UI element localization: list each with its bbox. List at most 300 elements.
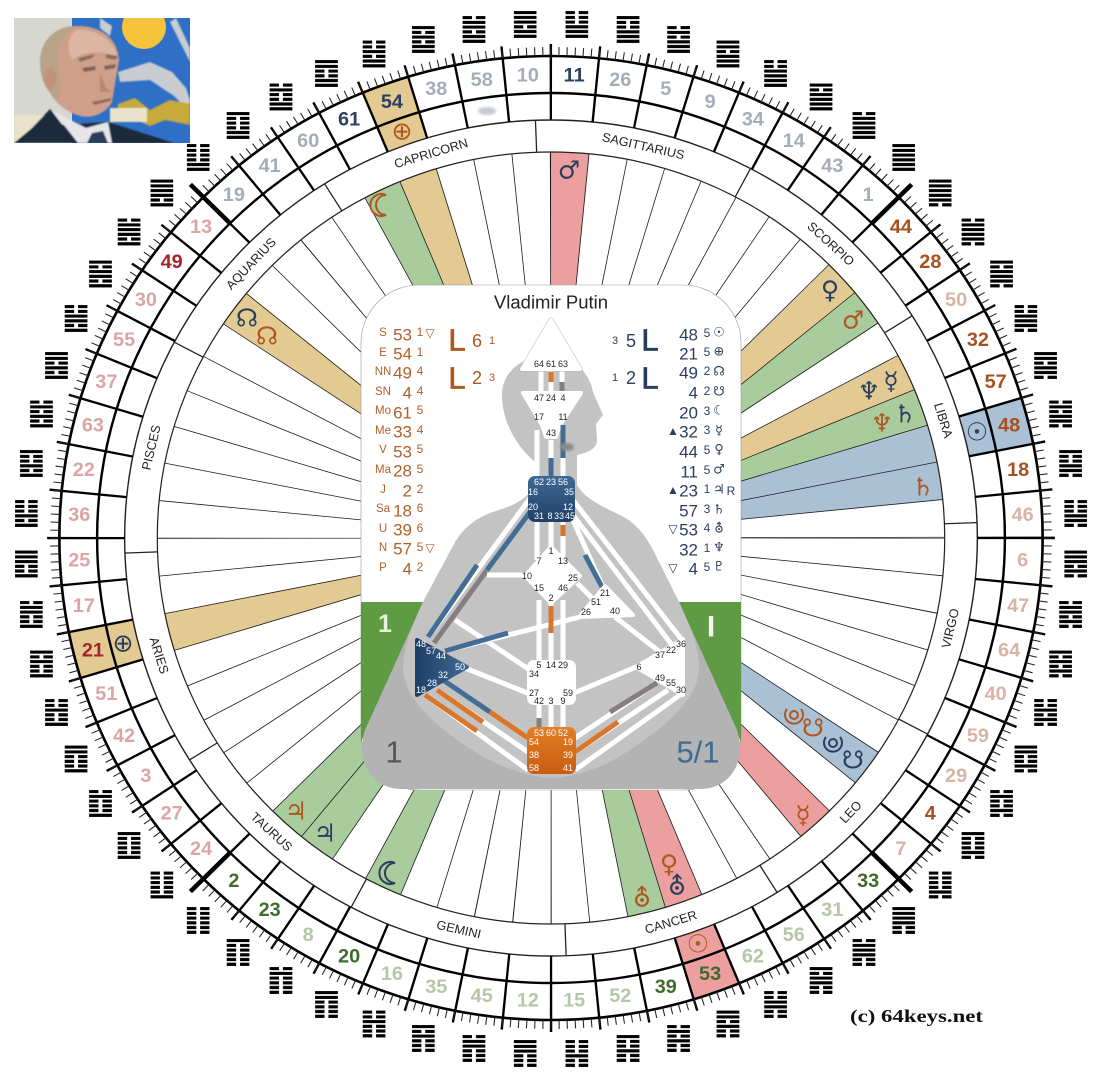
hexagram ring: ䷆ (927, 867, 954, 901)
hexagram ring: ䷂ (87, 785, 114, 820)
zodiac labels: CANCER (643, 908, 699, 937)
hexagram ring: ䷬ (460, 1030, 488, 1065)
gate numbers ring: 32 (967, 329, 989, 351)
icon: Earth in gate 54 cell: ⊕ (392, 116, 412, 146)
gate numbers ring: 47 (1007, 595, 1029, 617)
personality column: ▽ (668, 522, 678, 536)
panel: bodygraph card (361, 285, 741, 790)
hexagram ring: ䷽ (762, 986, 789, 1021)
sector: gate 48 (551, 426, 939, 574)
icon: south node gate 4 personality: ☋ (802, 714, 824, 742)
design column: 61 (393, 404, 412, 422)
personality column: 4 (689, 560, 698, 578)
centre: ajna: 47 (534, 393, 544, 403)
gate numbers ring: 4 (925, 803, 936, 825)
green corner right (677, 602, 741, 742)
highlighted cell: gate 54 (363, 75, 433, 154)
centre: G diamond: 7 (536, 556, 542, 566)
design column: 28 (393, 462, 412, 480)
design variables right: L (641, 322, 659, 358)
centre: sacral: 42 (534, 696, 544, 706)
centre: G diamond: 1 (548, 546, 554, 556)
centre: root: 38 (529, 750, 539, 760)
centre: head: 64 (534, 359, 544, 369)
hexagram ring: ䷎ (563, 1035, 590, 1070)
personality column: ♀ (714, 442, 724, 458)
centre: throat: 35 (564, 487, 574, 497)
gate numbers ring: 31 (821, 899, 843, 921)
hexagram ring: ䷼ (313, 55, 340, 90)
gate numbers ring: 19 (223, 184, 245, 206)
hexagram ring: ䷔ (28, 646, 55, 680)
gate numbers ring: 62 (742, 946, 764, 967)
personality column: ☋ (713, 384, 725, 400)
body silhouette (403, 355, 699, 778)
hexagram ring: ䷣ (13, 495, 40, 530)
hexagram ring: ䷜ (988, 785, 1015, 820)
centre: solar plexus: 49 (655, 673, 665, 683)
personality column: 21 (679, 344, 698, 364)
hexagram ring: ䷻ (267, 79, 295, 114)
gate numbers ring: 13 (190, 216, 212, 238)
centre: G diamond: 25 (568, 573, 578, 583)
hexagram ring: ䷛ (959, 214, 987, 249)
design column: Me (375, 425, 391, 437)
gate numbers ring: 39 (655, 976, 677, 998)
design column: SN (375, 386, 391, 398)
hexagram ring: ䷩ (62, 741, 90, 776)
icon: Jupiter gate 2: ♃ (285, 796, 307, 826)
gate numbers ring: 40 (985, 683, 1007, 705)
centre: root (527, 727, 576, 774)
personality variables left: 6 (472, 331, 482, 351)
centre: throat: 33 (554, 511, 564, 521)
centre: spleen: 57 (426, 646, 436, 656)
hexagram ring: ䷵ (360, 36, 388, 70)
centre: sacral: 3 (548, 696, 554, 706)
channels (425, 370, 682, 770)
design column: 5 (417, 462, 424, 476)
gate numbers ring: 30 (135, 289, 157, 311)
design column: 6 (417, 501, 424, 515)
hexagram ring: ䷺ (1012, 741, 1040, 776)
definition number: 1 (385, 734, 403, 770)
highlighted cell: gate 21 (67, 614, 145, 678)
centre: ajna: 24 (546, 393, 556, 403)
gate numbers ring: 5 (660, 78, 671, 100)
icon: Sun in gate 53 cell: ☉ (687, 930, 709, 958)
personality column: 5 (704, 560, 711, 574)
hexagram ring: ䷸ (1032, 347, 1059, 382)
icon: Moon gate 20 (379, 862, 395, 884)
icon: Moon gate 61 (370, 194, 386, 216)
centre: root: 54 (529, 737, 539, 747)
centre: G diamond (522, 546, 580, 603)
personality column: 1 (704, 482, 711, 496)
design column: 4 (417, 384, 424, 398)
personality column: 20 (679, 404, 698, 422)
design variables right: L (641, 360, 659, 396)
design column: 39 (393, 520, 412, 540)
design column: 1 (417, 345, 424, 359)
centre: sacral: 59 (563, 688, 573, 698)
gate numbers ring: 38 (425, 78, 447, 100)
personality column: ▲ (667, 483, 679, 497)
profile: 5/1 (676, 734, 720, 770)
hexagram ring: ䷗ (148, 867, 175, 901)
hexagram ring: ䷮ (1057, 596, 1084, 631)
design column: ▽ (425, 326, 435, 340)
icon: Mars gate 11: ♂ (558, 156, 580, 184)
gate numbers ring: 34 (742, 109, 764, 130)
gate numbers ring: 37 (95, 371, 117, 393)
sector: gate 20 (365, 524, 551, 895)
quadrant number right: I (707, 610, 715, 644)
design column: 5 (417, 403, 424, 417)
centre: root: 41 (563, 763, 573, 773)
centre: spleen: 44 (436, 651, 446, 661)
gate numbers ring: 22 (73, 459, 95, 481)
hexagram ring: ䷈ (714, 36, 742, 70)
icon: Mercury gate 33: ☿ (795, 800, 811, 830)
zodiac labels: PISCES (139, 424, 164, 471)
hexagram ring: ䷇ (267, 962, 295, 997)
centre: G diamond: 10 (522, 571, 532, 581)
icon: south node gate 4 design: ☋ (842, 746, 864, 774)
design column: 18 (393, 502, 412, 520)
design column: 1 (417, 325, 424, 339)
hexagram ring: ䷄ (665, 21, 692, 56)
credit: (c) 64keys.net (850, 1006, 983, 1027)
sector: gate 23 (300, 517, 551, 859)
personality variables left: L (448, 322, 466, 358)
hexagram ring: ䷾ (28, 396, 55, 430)
hexagram ring: ䷘ (13, 546, 40, 581)
hexagram ring: ䷙ (614, 11, 642, 46)
centre: G diamond: 46 (558, 583, 568, 593)
hexagram ring: ䷦ (665, 1020, 692, 1055)
icon: Pluto gate 4 personality (785, 709, 803, 724)
centre: root: 53 (534, 728, 544, 738)
centre: sacral: 9 (560, 696, 566, 706)
hexagram ring: ䷓ (313, 986, 340, 1021)
centre: ajna: 17 (534, 412, 544, 422)
hexagram ring: ䷰ (115, 214, 143, 249)
gate numbers ring: 29 (945, 765, 967, 787)
gate numbers ring (68, 65, 1034, 1011)
gate numbers ring: 64 (998, 640, 1020, 661)
icon: north node gate 49 design: ☊ (236, 304, 258, 332)
personality column: ♇ (713, 560, 725, 574)
centre: ego (579, 586, 633, 617)
design column: 2 (403, 482, 412, 500)
gate numbers ring: 27 (161, 803, 183, 825)
centre: ego: 51 (591, 597, 601, 607)
hexagram ring: ䷤ (43, 347, 70, 382)
gate numbers ring: 8 (303, 924, 314, 946)
design column: 2 (417, 482, 424, 496)
icon: north node gate 49 personality: ☊ (256, 322, 278, 350)
design variables right: 2 (626, 368, 636, 388)
personality column: 48 (679, 326, 698, 344)
centre: sacral: 29 (558, 660, 568, 670)
centre: solar plexus: 30 (676, 685, 686, 695)
design column: 54 (393, 344, 412, 364)
zodiac labels: SAGITTARIUS (601, 130, 686, 162)
gate numbers ring: 45 (471, 985, 493, 1007)
gate numbers ring: 36 (68, 504, 90, 526)
icon: Mars gate 28: ♂ (842, 306, 864, 334)
hexagram ring: ䷭ (1062, 495, 1089, 530)
design variables right (612, 322, 659, 396)
gate numbers ring: 53 (699, 963, 721, 985)
gate numbers ring: 58 (471, 69, 493, 91)
hexagram ring: ䷲ (43, 694, 70, 729)
design column: S (379, 327, 387, 339)
personality column: 32 (679, 540, 698, 560)
personality variables left: L (448, 360, 466, 396)
centre: solar plexus: 37 (655, 650, 665, 660)
zodiac labels: VIRGO (939, 607, 962, 650)
centre: throat (528, 476, 575, 522)
design column: 33 (393, 422, 412, 442)
personality column: ⛢ (714, 522, 724, 536)
design column: Mo (375, 405, 391, 417)
hexagram ring: ䷉ (512, 6, 539, 41)
hexagram ring: ䷁ (185, 902, 212, 937)
zodiac labels (139, 130, 962, 941)
centre: throat: 20 (528, 502, 538, 512)
design column: Sa (376, 503, 391, 515)
gate numbers ring: 63 (82, 415, 104, 436)
icon: Saturn gate 18: ♄ (912, 472, 934, 502)
centre: throat: 62 (534, 477, 544, 487)
centre: throat: 31 (534, 511, 544, 521)
gate numbers ring: 50 (945, 289, 967, 311)
sector: gate 2 (271, 514, 551, 836)
hexagram ring: ䷧ (1032, 694, 1059, 729)
centre: spleen: 50 (455, 662, 465, 672)
gate numbers ring: 24 (190, 838, 212, 860)
personality variables left: 2 (472, 368, 482, 388)
zodiac labels: TAURUS (248, 810, 295, 854)
gate numbers ring: 2 (228, 870, 239, 892)
centre: sacral: 14 (546, 660, 556, 670)
centre: G diamond: 13 (558, 556, 568, 566)
personality column: 5 (704, 463, 711, 477)
gate numbers ring: 25 (68, 550, 90, 572)
design variables right: 1 (612, 372, 618, 384)
hexagram ring: ䷍ (807, 79, 835, 114)
gate numbers ring: 7 (895, 838, 906, 860)
gate numbers ring: 55 (113, 329, 135, 351)
personality column: 23 (679, 482, 698, 500)
personality column: ☉ (713, 326, 725, 340)
personality column: 5 (704, 326, 711, 340)
design variables right: 3 (612, 335, 618, 347)
gate numbers ring: 35 (425, 976, 447, 998)
hexagram ring: ䷞ (850, 934, 878, 969)
centre: head: 63 (558, 359, 568, 369)
quadrant number left: 1 (378, 610, 392, 638)
gate numbers ring: 9 (705, 91, 716, 113)
personality column: ☿ (715, 424, 723, 438)
hexagram ring: ䷶ (62, 300, 90, 335)
smudge on neck (560, 443, 574, 451)
hexagram ring: ䷖ (224, 934, 252, 969)
gate numbers ring: 54 (381, 91, 403, 113)
centre: solar plexus (636, 639, 686, 695)
design column: J (380, 484, 386, 496)
gate numbers ring: 43 (821, 155, 843, 177)
centre: solar plexus: 55 (666, 678, 676, 688)
icon: Venus gate 44: ♀ (821, 276, 839, 304)
centre: ajna (523, 393, 581, 440)
design column: NN (375, 366, 391, 378)
hexagram ring: ䷫ (927, 175, 954, 209)
hexagram ring: ䷨ (224, 107, 252, 142)
icon: Venus gate 53: ♀ (660, 850, 678, 878)
personality column: ♂ (713, 462, 725, 478)
centre: G diamond: 15 (534, 583, 544, 593)
highlighted cell: gate 48 (957, 398, 1035, 462)
hexagram ring: ䷴ (714, 1006, 742, 1040)
gate numbers ring: 60 (297, 130, 319, 152)
outer body band (362, 548, 740, 789)
design column: 6 (417, 521, 424, 535)
sector: gate 11 Mars (551, 152, 590, 538)
icon: Mercury gate 32: ☿ (883, 366, 899, 396)
hexagram ring: ䷕ (18, 445, 45, 480)
gate numbers ring: 51 (95, 683, 117, 705)
design column: 49 (393, 364, 412, 382)
title: Vladimir Putin (494, 292, 608, 312)
gate numbers ring: 15 (563, 990, 585, 1011)
centre: root: 19 (563, 737, 573, 747)
hexagram ring: ䷃ (959, 827, 987, 862)
design column: 4 (417, 364, 424, 378)
smudge in gate 58 cell (478, 107, 496, 115)
gate numbers ring: 18 (1007, 459, 1029, 481)
design column: 4 (403, 560, 412, 578)
personality variables left: 3 (489, 372, 495, 384)
personality column: 4 (689, 384, 698, 402)
sector: gate 49 (224, 292, 572, 538)
centre: sacral: 27 (529, 688, 539, 698)
design column: V (379, 444, 387, 456)
hexagram ring: ䷚ (115, 827, 143, 862)
centre: head: 61 (546, 359, 556, 369)
photo portrait (14, 5, 190, 143)
gate numbers ring: 56 (783, 924, 805, 946)
personality column: 53 (679, 520, 698, 540)
personality column: ♄ (713, 502, 725, 518)
design variables right: 5 (626, 331, 636, 351)
personality column: ♃ (713, 482, 725, 498)
centre: throat: 16 (528, 487, 538, 497)
centre: spleen: 28 (427, 678, 437, 688)
gate numbers ring: 26 (609, 69, 631, 91)
personality column: 49 (679, 364, 698, 382)
zodiac labels: LEO (837, 798, 865, 826)
centre: throat: 45 (565, 511, 575, 521)
personality column: 44 (679, 442, 698, 462)
sector: gate 44 (551, 265, 857, 565)
personality column: 32 (679, 422, 698, 442)
hexagram ring: ䷪ (850, 107, 878, 142)
gate numbers ring: 23 (259, 899, 281, 921)
gate numbers ring: 46 (1012, 504, 1034, 526)
hexagram ring: ䷡ (762, 55, 789, 90)
personality variables left (448, 322, 495, 396)
centre: ajna: 4 (560, 393, 566, 403)
sector: gate 4 (530, 538, 878, 784)
design column: 5 (417, 540, 424, 554)
hexagram ring: ䷀ (890, 139, 917, 174)
personality column: 4 (704, 521, 711, 535)
design column: 53 (393, 442, 412, 462)
icon: Saturn gate 57: ♄ (894, 400, 916, 428)
personality column: ⊕ (714, 344, 724, 360)
centre: root: 60 (546, 728, 556, 738)
hexagram ring: ䷷ (807, 962, 835, 997)
hexagram ring: ䷋ (512, 1035, 539, 1070)
centre: solar plexus: 6 (636, 662, 642, 672)
personality column: ▲ (667, 424, 679, 438)
personality column: ☾ (713, 404, 725, 418)
design column: 5 (417, 442, 424, 456)
hexagram ring: ䷯ (1047, 396, 1074, 430)
icon: Uranus gate 39: ⛢ (633, 884, 651, 912)
hexagram ring: ䷥ (410, 21, 437, 56)
gate numbers ring: 14 (783, 130, 805, 152)
gate numbers ring: 3 (140, 765, 152, 787)
icon: Jupiter gate 23: ♃ (314, 818, 336, 848)
gate numbers ring: 41 (259, 155, 281, 177)
icon: Neptune gate 32: ♆ (858, 376, 880, 406)
gate numbers ring: 28 (919, 251, 941, 273)
centre: sacral: 34 (529, 669, 539, 679)
zodiac labels: LIBRA (931, 401, 955, 440)
personality column: 5 (704, 345, 711, 359)
zodiac labels: GEMINI (435, 918, 482, 941)
personality column: 5 (704, 443, 711, 457)
personality column: 2 (704, 364, 711, 378)
personality column: ☊ (713, 364, 725, 380)
centre: ajna: 11 (558, 412, 568, 422)
gate numbers ring: 61 (338, 109, 360, 130)
gate numbers ring: 21 (82, 640, 104, 661)
personality column: R (727, 484, 736, 498)
zodiac labels: CAPRICORN (393, 136, 470, 171)
personality column: 11 (680, 462, 698, 482)
hexagram ring: ䷅ (1062, 546, 1089, 581)
icon: Earth in gate 21 cell: ⊕ (113, 628, 133, 658)
hexagram ring: ䷏ (360, 1006, 388, 1040)
centre: throat: 23 (546, 477, 556, 487)
design column (375, 325, 435, 578)
icon: Neptune gate 57: ♆ (871, 408, 893, 438)
sector: gate 57 (551, 390, 930, 573)
gate numbers ring: 52 (609, 985, 631, 1007)
sector: gate 32 (551, 356, 916, 571)
design column: ▽ (425, 541, 435, 555)
personality column: 2 (704, 384, 711, 398)
sector: gate 39 (514, 538, 665, 918)
centre: spleen: 18 (416, 685, 426, 695)
gate numbers ring: 57 (985, 371, 1007, 393)
design column: U (379, 523, 387, 535)
